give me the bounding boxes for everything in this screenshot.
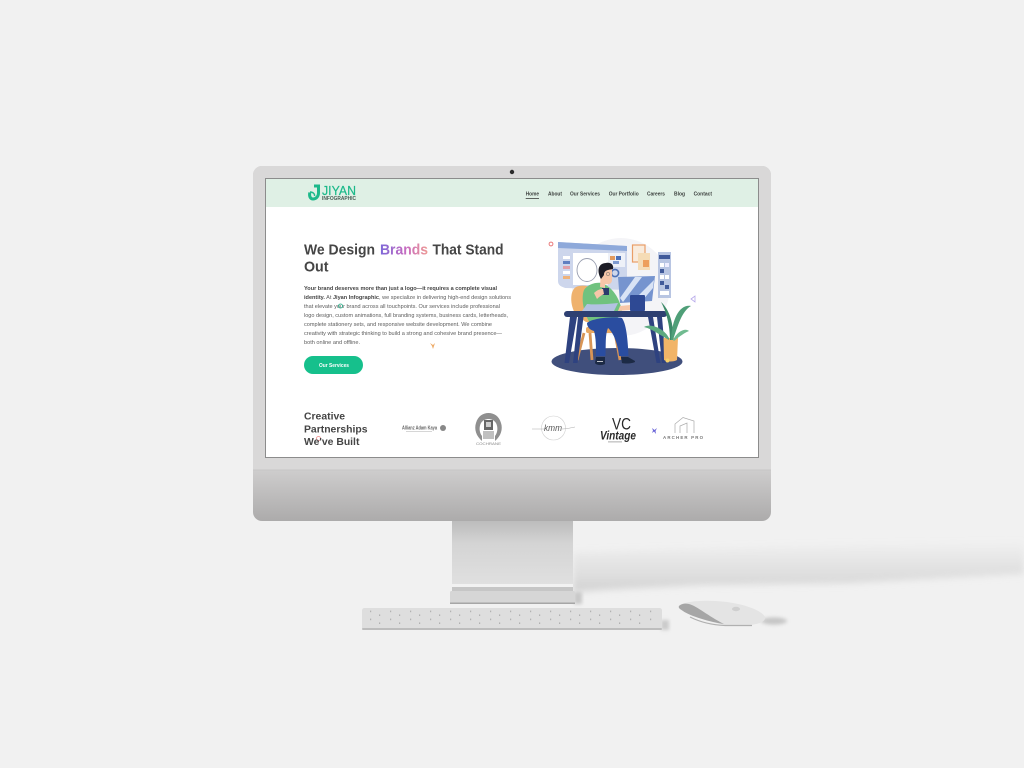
shirt [583,283,622,323]
logo tagline: INFOGRAPHIC [322,196,356,202]
nav links: Our Portfolio [609,191,639,197]
chair [571,286,620,360]
monitor on desk [618,276,655,311]
partnerships heading [304,412,368,448]
logo: VC Vintage [600,414,636,442]
floor ellipse [552,348,682,375]
nav links: Contact [694,191,712,197]
logo: VC Vintage: Vintage [600,428,636,442]
monitor body [253,166,771,521]
navigation bar [266,179,758,207]
hero illustration [552,238,691,375]
webcam [510,170,514,174]
logo [310,183,356,202]
hero heading [304,243,504,276]
nav links: Our Services [570,191,600,197]
head [600,268,612,288]
hero paragraph: Your brand deserves more than just a logo—it requires a complete visual [304,286,497,292]
desk shadow [573,542,1024,630]
logo: Cochrane: COCHRANE [476,442,502,446]
button: our services: Our Services [319,363,349,369]
arm [618,305,630,311]
backdrop blob [572,238,670,336]
partnerships heading: Partnerships [304,424,368,435]
logo: kmm: kmm [544,423,562,433]
nav links [526,191,712,199]
nav links: About [548,191,562,197]
hero paragraph: identity. At Jiyan Infographic, we specialize in delivering high-end design solutions [304,295,511,301]
logo: Archer Pro: ARCHER PRO [663,435,704,440]
pants [587,317,628,356]
hero paragraph: creativity with strategic thinking to build a strong and cohesive brand presence— [304,331,502,337]
partnerships heading: Creative [304,412,345,423]
logo: Archer Pro [663,418,704,440]
mug [602,288,609,295]
screen [266,178,758,458]
logo wordmark: JIYAN [322,183,356,198]
tool panel [658,252,671,298]
nav links: Blog [674,191,685,197]
decorative shapes [316,242,695,440]
keyboard [362,608,662,630]
logo: Allianz Adam Kaya: Allianz Adam Kaya [402,426,438,432]
logo: kmm [532,416,575,440]
tablet on desk [582,303,618,311]
nav links: Home [526,191,539,197]
hero heading: Brands [380,243,428,259]
desk [564,311,667,363]
hero paragraph: logo design, custom animations, full branding systems, business cards, letterheads, [304,313,508,319]
shoes [595,357,605,365]
monitor stand [450,521,575,604]
hero paragraph: complete stationery sets, and responsive website development. We combine [304,322,492,328]
logo icon [310,186,318,199]
hero paragraph: that elevate your brand across all touchpoints. Our services include professional [304,304,500,310]
partnerships heading: We've Built [304,437,360,448]
mouse [679,601,765,626]
person [583,263,635,365]
nav links: Careers [647,191,665,197]
orange cards [632,245,650,270]
plant [644,302,691,362]
hero heading: That Stand [432,243,504,259]
hero paragraph [304,286,511,346]
button: our services [304,356,363,374]
logo: Cochrane [475,413,502,446]
design window [558,242,627,290]
logo: VC Vintage: VC [612,414,631,434]
hero heading: Out [304,260,329,276]
hero heading: We Design [304,243,375,259]
hero paragraph: both online and offline. [304,340,360,346]
